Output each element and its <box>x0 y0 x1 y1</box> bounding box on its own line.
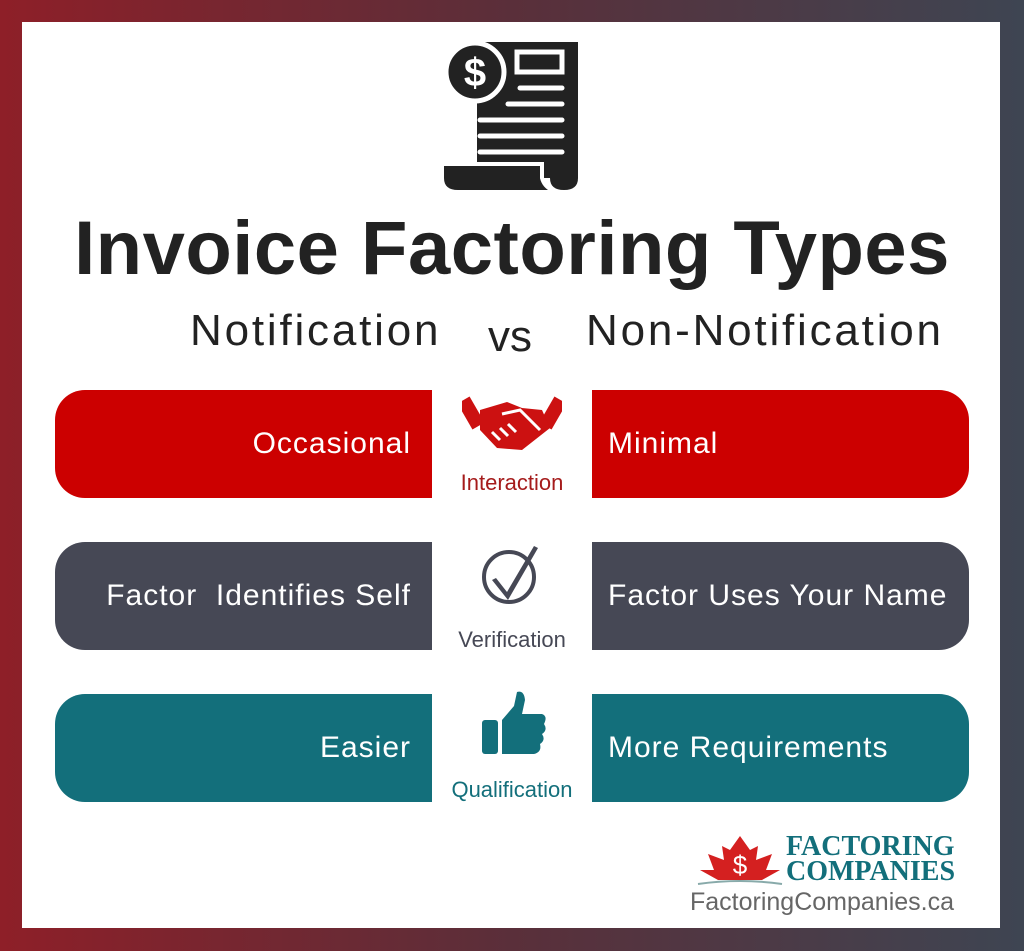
logo <box>690 831 955 916</box>
row: interaction <box>55 390 969 498</box>
row: verification <box>55 542 969 652</box>
icon: maple leaf: $ <box>733 850 748 880</box>
logo: FACTORING <box>786 831 955 862</box>
subtitle: Notification <box>190 306 441 355</box>
row: qualification <box>55 692 969 802</box>
text: Factor Identifies Self <box>106 579 411 612</box>
text: Verification <box>458 627 566 652</box>
icon: invoice document <box>444 42 578 190</box>
subtitle: Non-Notification <box>586 306 944 355</box>
text: Occasional <box>253 427 411 460</box>
text: Easier <box>320 731 411 764</box>
text: Factor Uses Your Name <box>608 579 947 612</box>
text: Minimal <box>608 427 718 460</box>
icon: handshake <box>462 396 562 450</box>
text: More Requirements <box>608 731 888 764</box>
icon: maple leaf <box>698 836 782 885</box>
subtitle <box>190 306 944 361</box>
subtitle: vs <box>488 312 532 361</box>
title: Invoice Factoring Types <box>74 206 950 291</box>
text: Qualification <box>451 777 573 802</box>
logo: FactoringCompanies.ca <box>690 888 954 916</box>
logo: COMPANIES <box>786 856 955 887</box>
text: Interaction <box>461 470 563 495</box>
icon: invoice document: $ <box>464 51 486 95</box>
icon: check <box>482 546 538 604</box>
icon: thumbs up <box>482 692 546 754</box>
